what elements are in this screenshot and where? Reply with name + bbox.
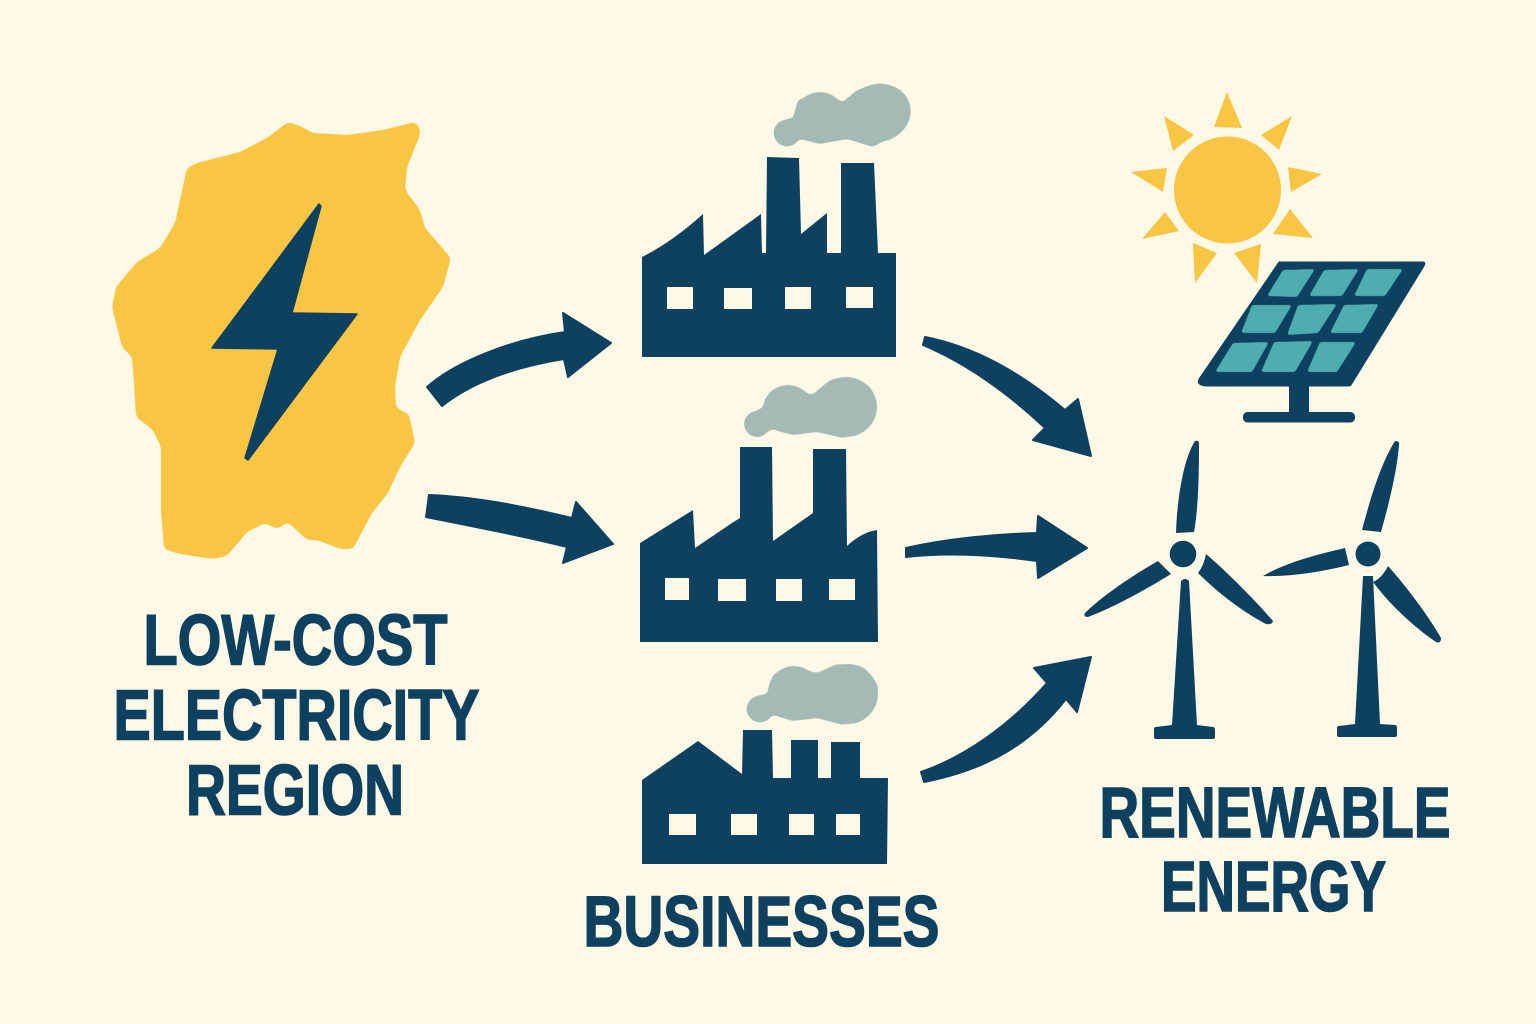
factory: top xyxy=(642,76,917,357)
smoke xyxy=(744,377,877,438)
icon: large wind turbine xyxy=(1084,441,1273,739)
icon: lightning bolt xyxy=(212,204,357,460)
arrow: top factory to renewables xyxy=(923,337,1091,456)
icon: solar panel xyxy=(1198,262,1425,422)
heading: low-cost electricity region: REGION xyxy=(186,751,404,830)
arrow: bottom factory to renewables xyxy=(921,657,1091,782)
smoke xyxy=(746,664,878,725)
icon: sun xyxy=(1131,92,1322,283)
region map shape xyxy=(112,122,451,559)
icon: small wind turbine xyxy=(1263,441,1441,737)
smoke xyxy=(774,76,917,150)
arrow: middle factory to renewables xyxy=(906,516,1087,578)
heading: low-cost electricity region: LOW-COST xyxy=(144,601,448,680)
heading: low-cost electricity region: ELECTRICITY xyxy=(114,676,480,755)
heading: low-cost electricity region xyxy=(114,601,480,830)
arrow: region to top factory xyxy=(427,313,611,406)
arrow: region to middle factory xyxy=(426,495,613,563)
factory: middle xyxy=(640,377,878,642)
heading: renewable energy: ENERGY xyxy=(1161,848,1386,927)
heading: businesses: BUSINESSES xyxy=(584,883,940,962)
factory: bottom xyxy=(642,664,888,864)
heading: renewable energy xyxy=(1100,774,1450,927)
